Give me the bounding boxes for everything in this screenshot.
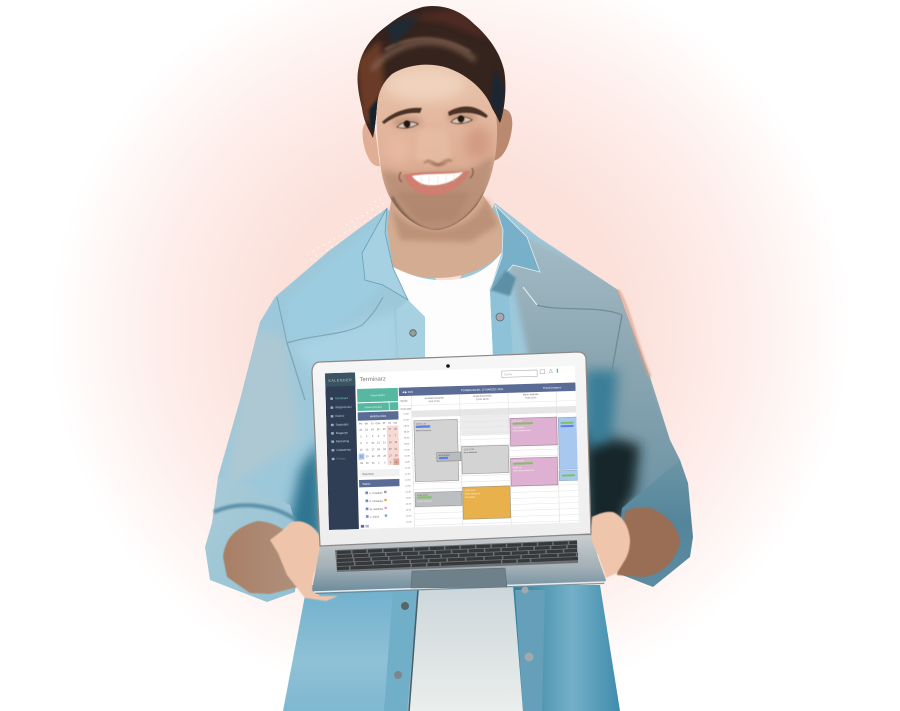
- screen: appointment blocks: [413, 416, 579, 521]
- screen: mini calendar: 10: [371, 442, 375, 445]
- figure: lower torso: [283, 585, 620, 711]
- screen: appointment blocks: Kosmetologia twarzy: [513, 429, 531, 432]
- screen: schedule grid: 09:00: [404, 437, 410, 440]
- laptop base: [312, 535, 606, 594]
- laptop screen: [325, 366, 579, 530]
- screen: search box: Szukaj: [504, 372, 512, 376]
- screen: schedule grid: 11:00: [405, 461, 411, 464]
- screen: appointment blocks: 14:00 16:00: [465, 490, 476, 492]
- screen: sidebar: Ustawienia: [336, 448, 351, 452]
- screen: mini calendar: 28: [395, 454, 398, 457]
- screen: mini calendar: 2: [366, 435, 368, 438]
- screen: page title: Terminarz: [359, 377, 386, 383]
- right eyebrow: [448, 106, 488, 118]
- screen: staff column headings: Kinga Sosnowska: [473, 395, 492, 398]
- screen: staff list: [359, 479, 401, 528]
- screen: mini calendar: 25: [377, 428, 380, 431]
- figure: shirt placket and collar: [362, 205, 540, 358]
- laptop: [312, 352, 606, 594]
- screen: sidebar: Pomoc: [336, 456, 346, 461]
- screen: mini calendar: 25: [377, 455, 381, 458]
- screen: sidebar: Magazyn: [336, 431, 348, 435]
- left eye: [397, 120, 418, 128]
- screen: staff column headings: 10:00 16:00: [476, 399, 489, 401]
- screen: schedule grid: [400, 391, 579, 528]
- screen: sidebar: Marketing: [336, 439, 350, 443]
- figure: face: [377, 52, 497, 234]
- screen: appointment blocks: Konsultacja: [465, 496, 476, 499]
- right hand: [590, 512, 630, 578]
- screen: schedule grid: 07:00: [403, 413, 410, 416]
- screen: appointment blocks: Maria Lis: [513, 467, 521, 469]
- screen: mini calendar: 24: [372, 455, 375, 458]
- illustration: smiling man holding a laptop: [92, 0, 808, 711]
- screen: schedule grid: 13:00: [405, 485, 411, 488]
- screen: appointment blocks: Konsultacja dietetyczna: [513, 469, 535, 472]
- screen: appointment blocks: Wizyta kontrolna: [417, 500, 433, 503]
- screen: mini calendar: [358, 411, 400, 466]
- screen: mini calendar: 16: [366, 448, 369, 451]
- screen: schedule grid: 16:00: [406, 521, 412, 524]
- screen: sidebar: Statystyki: [336, 422, 349, 427]
- screen: appointment blocks: 12:00 13:30: [513, 460, 524, 463]
- screen: mini calendar: 12: [383, 441, 386, 444]
- screen: sidebar: Wiadomości: [335, 405, 352, 409]
- screen: mini calendar: 1: [360, 435, 362, 438]
- screen: schedule grid: 07:30: [404, 419, 410, 422]
- screen: schedule grid: 09:30: [404, 443, 410, 446]
- screen: mini calendar: 4: [378, 435, 380, 438]
- screen: new visit buttons: [357, 388, 398, 411]
- screen: mini calendar: 22: [360, 455, 363, 458]
- screen: mini calendar: 31: [372, 462, 375, 465]
- screen: staff column headings: 9:00 15:00: [525, 397, 537, 400]
- screen: mini calendar: 21: [395, 448, 398, 451]
- screen: mini calendar: Wt: [365, 422, 368, 426]
- figure: neck: [387, 195, 502, 278]
- screen: schedule grid: 15:00: [406, 509, 412, 512]
- screen: schedule grid: 08:30: [404, 431, 410, 434]
- screen: staff list: J. Sobol: [370, 515, 379, 519]
- figure: white t-shirt: [393, 252, 502, 357]
- screen: staff list: M. Jasińska: [370, 508, 384, 511]
- screen: schedule grid: 10:00: [404, 449, 410, 452]
- screen: search field: [359, 469, 400, 477]
- screen: mini calendar: 1: [378, 461, 380, 464]
- screen: mini calendar: 27: [388, 428, 392, 431]
- screen: mini calendar: 2: [384, 461, 386, 464]
- screen: appointment blocks: Masaż klasyczny: [465, 493, 480, 496]
- screen: sidebar: Klienci: [335, 414, 345, 418]
- screen: appointment blocks: 9:00 10:30: [512, 420, 523, 423]
- screen: schedule grid: 12:00: [405, 473, 411, 476]
- webcam: [446, 364, 450, 368]
- screen: mini calendar: 23: [365, 428, 368, 431]
- screen: calendar toolbar: PONIEDZIAŁEK, 27 MARZEC 2021: [461, 387, 504, 392]
- screen: sidebar: Terminarz: [335, 396, 349, 400]
- screen: staff column headings: Czas start: [401, 407, 411, 411]
- screen: staff list: S. Kowalski: [369, 492, 383, 495]
- screen: schedule grid: 08:00: [404, 425, 410, 428]
- neck shadow under chin: [390, 198, 498, 242]
- screen: schedule grid: 10:30: [404, 455, 411, 458]
- trackpad: [411, 568, 507, 588]
- screen: schedule grid: 12:30: [405, 479, 411, 482]
- screen: appointment blocks: 10:00 11:30: [416, 423, 427, 426]
- left hand: [270, 521, 338, 601]
- screen: mini calendar: Nd: [394, 422, 398, 425]
- screen: appointment blocks: Anna Nowak: [512, 426, 524, 429]
- screen: mini calendar: 4: [396, 461, 398, 464]
- screen: sidebar: KALENDER: [328, 378, 352, 383]
- screen: appointment blocks: 11:30 13:00: [464, 449, 475, 451]
- screen: staff column headings: 9:00 17:00: [429, 401, 440, 403]
- screen: mini calendar: Pn: [359, 423, 363, 426]
- screen: schedule grid: 15:30: [406, 515, 412, 518]
- keyboard: [335, 540, 578, 572]
- screen: schedule grid: 13:30: [405, 491, 412, 494]
- screen: mini calendar: 11: [377, 441, 380, 444]
- right sleeve cuff: [617, 460, 693, 587]
- figure: ears: [362, 109, 512, 166]
- screen: appointment blocks: Anna Nowacka: [464, 451, 478, 454]
- right eye: [451, 115, 472, 123]
- screen: staff column headings: Maria Jasińska: [523, 393, 539, 396]
- screen: mini calendar: MARCH 2021: [370, 414, 387, 418]
- screen: mini calendar: 14: [394, 441, 398, 444]
- screen: top icons: [540, 369, 557, 374]
- screen: calendar toolbar: Pokaż Dostępne: [543, 386, 562, 390]
- screen: mini calendar: 30: [366, 462, 369, 465]
- screen: mini calendar: Pt: [383, 422, 385, 425]
- screen: mini calendar: 8: [360, 442, 362, 445]
- screen: mini calendar: 3: [372, 435, 374, 438]
- screen: calendar toolbar: ◀ ▶ Dziś: [402, 390, 414, 394]
- screen: staff column headings: [400, 393, 539, 411]
- screen: mini calendar: 17: [372, 448, 375, 451]
- screen: mini calendar: 26: [383, 428, 386, 431]
- screen: new visit buttons: Nowa sprzedaż: [365, 406, 383, 409]
- right forearm: [617, 507, 680, 577]
- screen: mini calendar: 23: [366, 455, 369, 458]
- figure: hair: [356, 6, 505, 138]
- screen: staff list: K. Nowacka: [370, 500, 384, 503]
- screen: mini calendar: 28: [394, 428, 397, 431]
- screen: mini calendar: 18: [377, 448, 381, 451]
- screen: schedule grid: 11:30: [405, 467, 411, 470]
- screen: mini calendar: 5: [384, 435, 386, 438]
- laptop lid: [312, 352, 591, 546]
- screen: mini calendar: 26: [383, 455, 387, 458]
- left forearm: [223, 521, 298, 594]
- screen: mini calendar: 15: [360, 449, 363, 452]
- screen: mini calendar: 19: [383, 448, 387, 451]
- screen: schedule grid: 14:30: [406, 503, 412, 506]
- nose shadow: [424, 160, 452, 165]
- screen: mini calendar: 27: [389, 454, 392, 457]
- smile: [399, 168, 473, 195]
- screen: staff list: Widoki: [362, 482, 371, 486]
- screen: mini calendar: 24: [371, 428, 374, 431]
- left sleeve fold shadow: [214, 505, 296, 520]
- screen: mini calendar: Śr: [371, 422, 374, 425]
- screen: mini calendar: 22: [359, 429, 363, 432]
- screen: calendar toolbar: [399, 382, 576, 396]
- screen: staff column headings: Sprzęt:: [400, 400, 408, 403]
- screen: search field: Wyszukaj: [362, 472, 374, 476]
- screen: new visit buttons: Nowa wizyta: [371, 394, 385, 397]
- screen: sidebar: [325, 372, 359, 530]
- screen: schedule grid: 14:00: [405, 497, 412, 500]
- screen: mini calendar: 7: [395, 434, 397, 437]
- screen: mini calendar: Czw: [375, 422, 381, 425]
- decorative dotted patch behind shoulder: [303, 192, 388, 262]
- screen: appointment blocks: 14:00 15:00: [417, 495, 429, 497]
- screen: mini calendar: 20: [389, 448, 392, 451]
- screen: mini calendar: 13: [389, 441, 392, 444]
- screen: mini calendar: 6: [389, 434, 391, 437]
- screen: mini calendar: 29: [360, 462, 364, 465]
- screen: mini calendar: 9: [366, 442, 368, 445]
- screen: mini calendar: 3: [390, 461, 392, 464]
- screen: appointment blocks: Anna Kowal: [439, 454, 450, 457]
- left eyebrow: [382, 108, 422, 124]
- screen: staff column headings: Jarosław Kowalski: [424, 396, 444, 400]
- laptop front edge: [314, 582, 605, 592]
- screen: appointment blocks: Masaż klasyczny: [416, 430, 431, 432]
- left sleeve cuff: [205, 477, 300, 602]
- screen: search box: [502, 370, 537, 377]
- figure: upper shirt: [215, 203, 700, 560]
- screen: mini calendar: So: [388, 422, 392, 425]
